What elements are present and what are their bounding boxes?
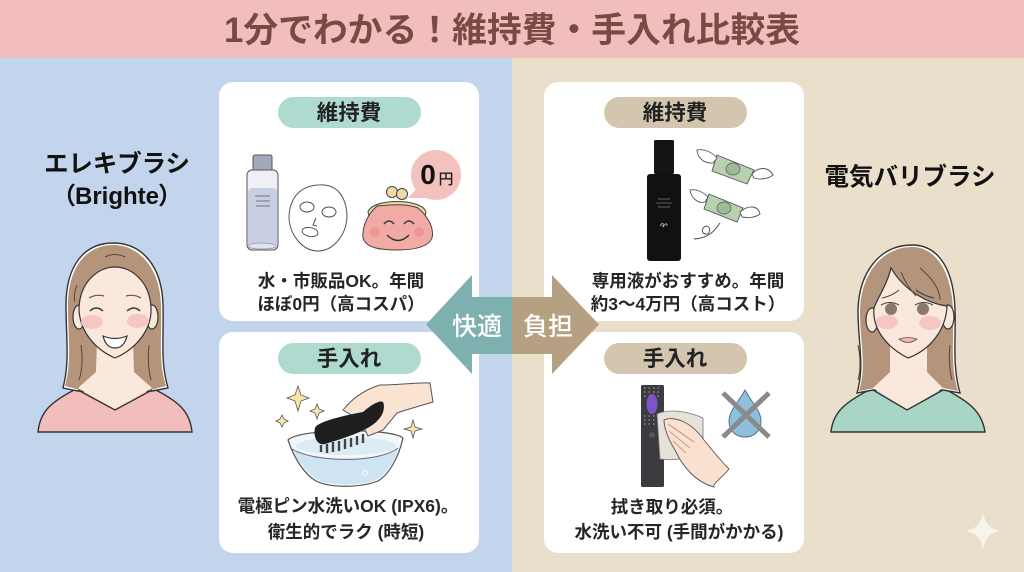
icon: white sparkle — [965, 512, 1001, 550]
arrow: burden, pointing right: 負担 — [523, 313, 573, 341]
icon: brush wiped with cloth — [641, 385, 729, 487]
illustration: smiling woman — [38, 243, 192, 432]
pill heading: maintenance cost: 維持費 — [317, 101, 381, 125]
description text: 電極ピン水洗いOK (IPX6)。 — [238, 496, 458, 516]
arrow: comfort, pointing left — [426, 275, 512, 374]
icon: sheet mask — [289, 185, 347, 251]
description text: 約3〜4万円（高コスト） — [591, 294, 785, 314]
description text: 水洗い不可 (手間がかかる) — [574, 522, 784, 542]
panel: left maintenance cost — [219, 82, 479, 321]
title banner: 1分でわかる！維持費・手入れ比較表 — [224, 11, 800, 50]
panel: right maintenance cost — [544, 82, 804, 321]
description text — [574, 497, 784, 542]
callout: zero yen: 0 — [420, 159, 436, 190]
pill heading: maintenance cost: 維持費 — [643, 101, 707, 125]
description text: 衛生的でラク (時短) — [268, 522, 424, 542]
title banner — [0, 0, 1024, 58]
callout: zero yen: 円 — [438, 171, 454, 188]
pill heading: maintenance cost — [278, 97, 421, 128]
arrow: burden, pointing right — [512, 275, 599, 374]
description text — [591, 271, 785, 314]
pill heading: care: 手入れ — [643, 347, 707, 371]
pill heading: maintenance cost — [604, 97, 747, 128]
icon: smiling coin purse — [363, 186, 432, 250]
description text — [257, 271, 425, 314]
right product name: 電気バリブラシ — [824, 162, 996, 191]
callout: zero yen — [408, 150, 461, 200]
icon: black serum bottle — [647, 140, 681, 261]
description text: 拭き取り必須。 — [611, 497, 733, 517]
arrow: comfort, pointing left: 快適 — [452, 313, 502, 341]
pill heading: care — [604, 343, 747, 374]
icon: crossed water drop — [723, 390, 769, 437]
left product name: エレキブラシ — [44, 150, 190, 178]
left product name: （Brighte） — [52, 183, 182, 210]
description text: ほぼ0円（高コスパ） — [257, 294, 425, 314]
left product name — [44, 150, 190, 210]
description text: 専用液がおすすめ。年間 — [592, 271, 784, 291]
illustration: troubled woman — [831, 245, 985, 432]
description text — [238, 496, 458, 542]
pill heading: care — [278, 343, 421, 374]
pill heading: care: 手入れ — [317, 347, 381, 371]
panel: left care — [219, 332, 479, 553]
panel: right care — [544, 332, 804, 553]
description text: 水・市販品OK。年間 — [258, 271, 424, 291]
icon: lotion bottle — [247, 155, 278, 250]
icon: winged banknotes — [690, 150, 773, 239]
icon: hand holding brush — [314, 383, 433, 453]
icon: sparkles — [276, 386, 422, 438]
icon: water bowl — [288, 431, 403, 486]
